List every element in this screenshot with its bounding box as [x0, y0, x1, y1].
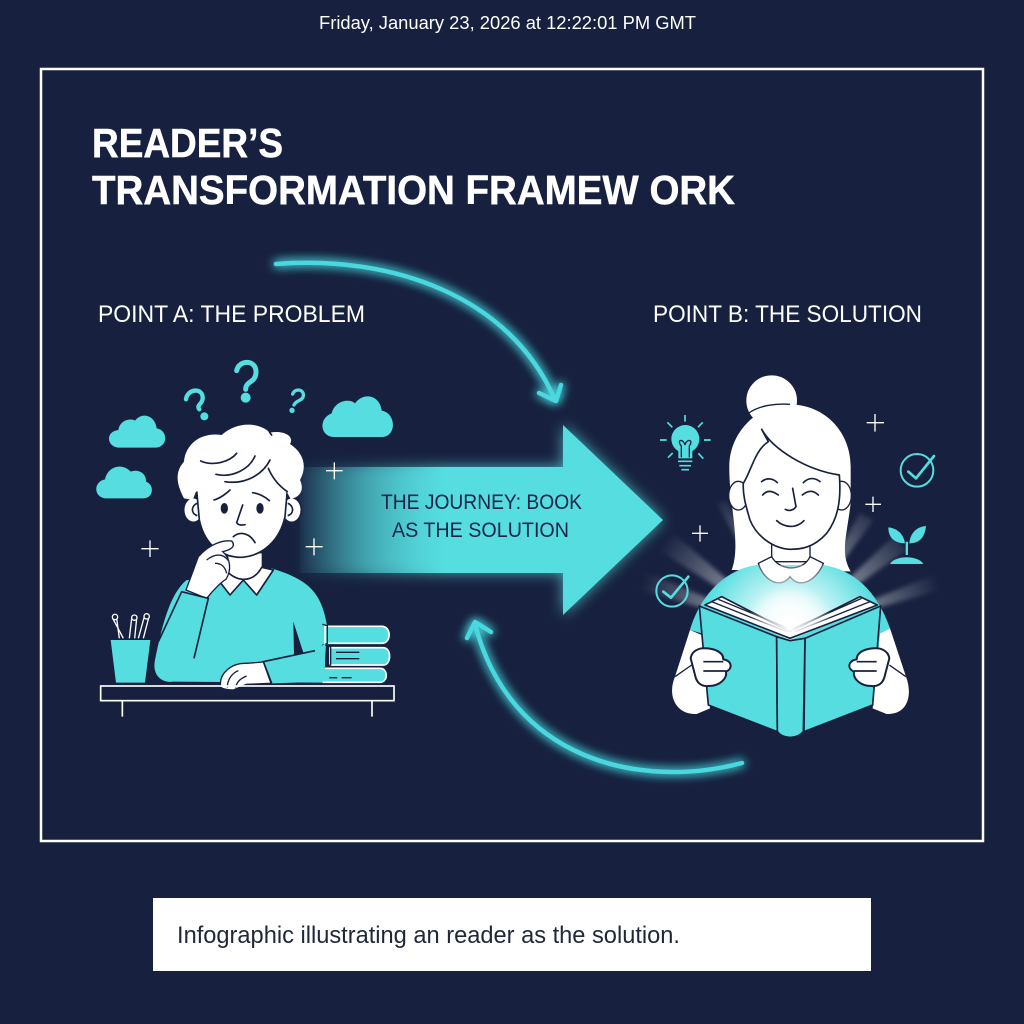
eyes [221, 503, 264, 514]
icon: question marks [186, 362, 303, 420]
arrow: bottom curved arc [467, 622, 742, 772]
open book [699, 597, 881, 737]
caption box [153, 898, 871, 971]
resting forearm [263, 643, 325, 683]
illustration: confused reader at desk [96, 362, 394, 717]
heading: point A: POINT A: THE PROBLEM [98, 301, 365, 328]
bun [746, 375, 798, 427]
hairline over bun [748, 404, 790, 413]
journey label: THE JOURNEY: BOOK [381, 490, 583, 514]
light rays [640, 500, 940, 633]
sweater [154, 568, 327, 683]
forearm outline [263, 651, 315, 683]
page glow [740, 583, 840, 637]
neck and collar [218, 553, 273, 595]
journey label: AS THE SOLUTION [392, 518, 569, 542]
desk [101, 686, 394, 717]
title: READER’S [92, 120, 283, 166]
icon: clouds [96, 396, 393, 498]
icon: light bulb [660, 415, 711, 470]
pencil cup [111, 614, 150, 683]
right hand [849, 648, 889, 686]
face [743, 429, 840, 549]
heading: point B: POINT B: THE SOLUTION [653, 301, 922, 328]
journey label [381, 490, 583, 542]
arrow: top curved arc [276, 263, 561, 401]
central journey arrow [300, 425, 663, 615]
finger lines [703, 662, 877, 671]
raised sleeve [155, 592, 208, 681]
hair [178, 425, 304, 500]
left hand [691, 648, 731, 686]
sparkles [692, 414, 884, 542]
caption box: Infographic illustrating an reader as the solution. [177, 922, 680, 949]
collar [758, 557, 823, 583]
book spine lines [322, 624, 359, 678]
hair [729, 404, 851, 571]
ears [729, 481, 851, 510]
icon: check circles [656, 454, 934, 607]
thinking hand [186, 541, 233, 598]
illustration: happy reader with glowing book [640, 375, 940, 737]
shirt [690, 565, 890, 703]
framed panel [41, 69, 983, 841]
finger lines [207, 555, 228, 573]
ears [184, 498, 301, 522]
sparkles [141, 462, 343, 557]
icon: sprout [888, 526, 926, 564]
resting hand [220, 662, 271, 690]
timestamp: Friday, January 23, 2026 at 12:22:01 PM GMT [319, 13, 696, 33]
white arms [672, 628, 909, 714]
head [197, 460, 287, 557]
resting hand fingers [227, 671, 247, 687]
title [92, 120, 735, 213]
sweater fold [293, 622, 303, 655]
title: TRANSFORMATION FRAMEW ORK [92, 167, 735, 213]
elbow lines [675, 665, 906, 677]
glow over shirt [703, 565, 878, 640]
facial features [762, 479, 820, 526]
hair strands and face lines [201, 423, 287, 543]
sleeve outline [158, 592, 208, 658]
neck [772, 543, 810, 562]
books stack [323, 626, 390, 682]
